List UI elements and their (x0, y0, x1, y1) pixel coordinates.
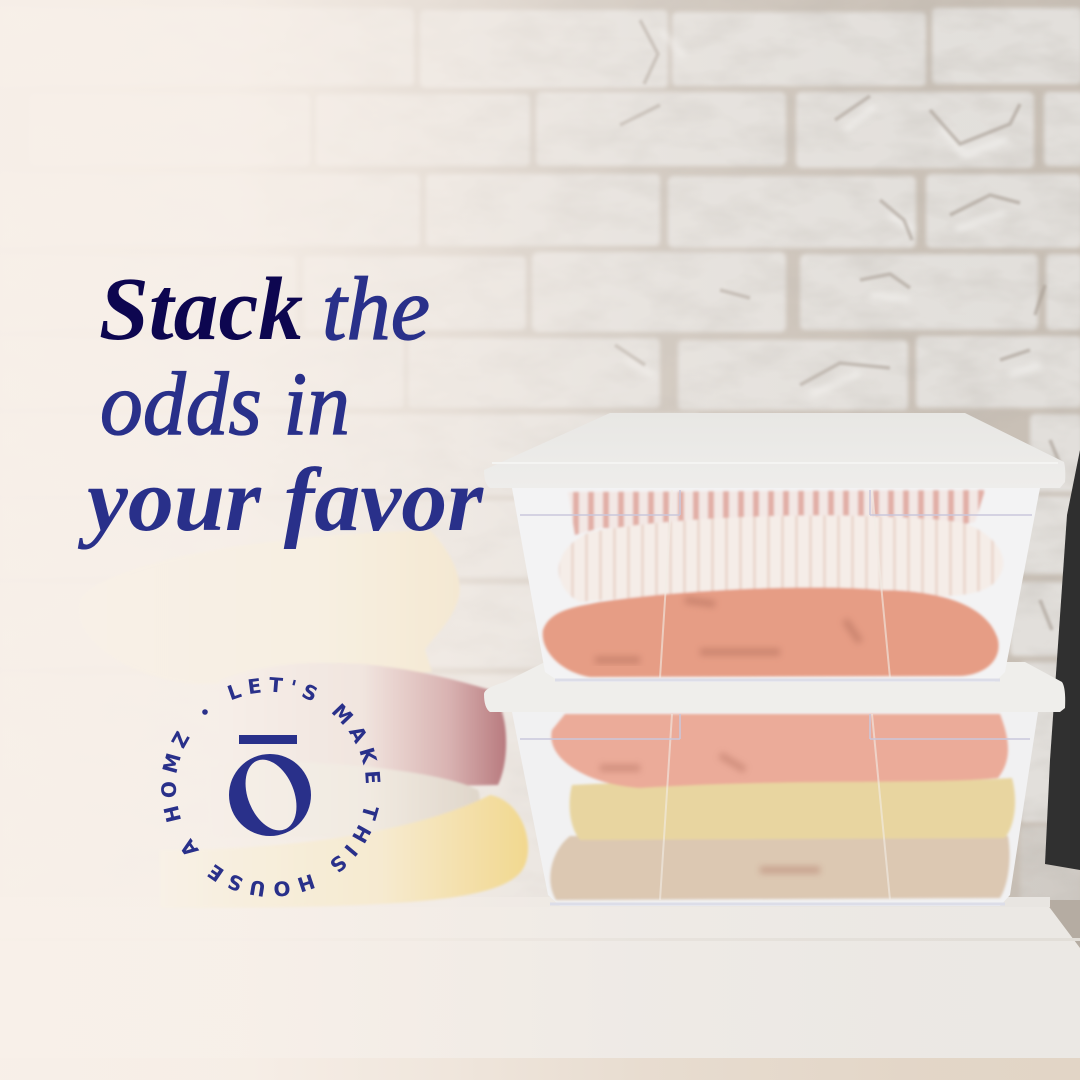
brick cracks (615, 20, 1060, 630)
brick highlights (625, 30, 1040, 395)
title word: Stack: Stack (99, 260, 303, 359)
clothes: cream knit (559, 515, 1003, 602)
sweater: cream knit (205, 762, 480, 838)
storage box: bottom (484, 662, 1065, 906)
clothes: striped pink (568, 490, 985, 535)
sweater: yellow fleece (160, 795, 528, 908)
logo ring (229, 754, 311, 836)
title word: the: the (322, 260, 430, 359)
clothes: salmon (551, 714, 1008, 788)
dark garment at right edge (1045, 450, 1080, 870)
title line 3: your favor (77, 451, 484, 550)
clothes: orange (543, 588, 999, 677)
slogan dot (202, 709, 208, 715)
circular slogan: LET'S MAKE THIS HOUSE A HOMZ (161, 677, 380, 897)
box lid (484, 413, 1065, 488)
clothes: yellow (570, 778, 1015, 840)
clothes: tan (550, 836, 1010, 900)
title line 2: odds in (100, 355, 350, 454)
sweater: top yellow knit (79, 530, 460, 684)
box body (512, 488, 1040, 682)
title (77, 260, 484, 550)
logo badge (161, 677, 380, 897)
sweater: red knit (220, 662, 506, 790)
folded sweaters on the left (79, 530, 528, 908)
storage box: top (484, 413, 1065, 682)
logo macron bar (239, 735, 297, 744)
box body (512, 712, 1038, 906)
shelf (0, 897, 1080, 1080)
box lid (484, 662, 1065, 712)
